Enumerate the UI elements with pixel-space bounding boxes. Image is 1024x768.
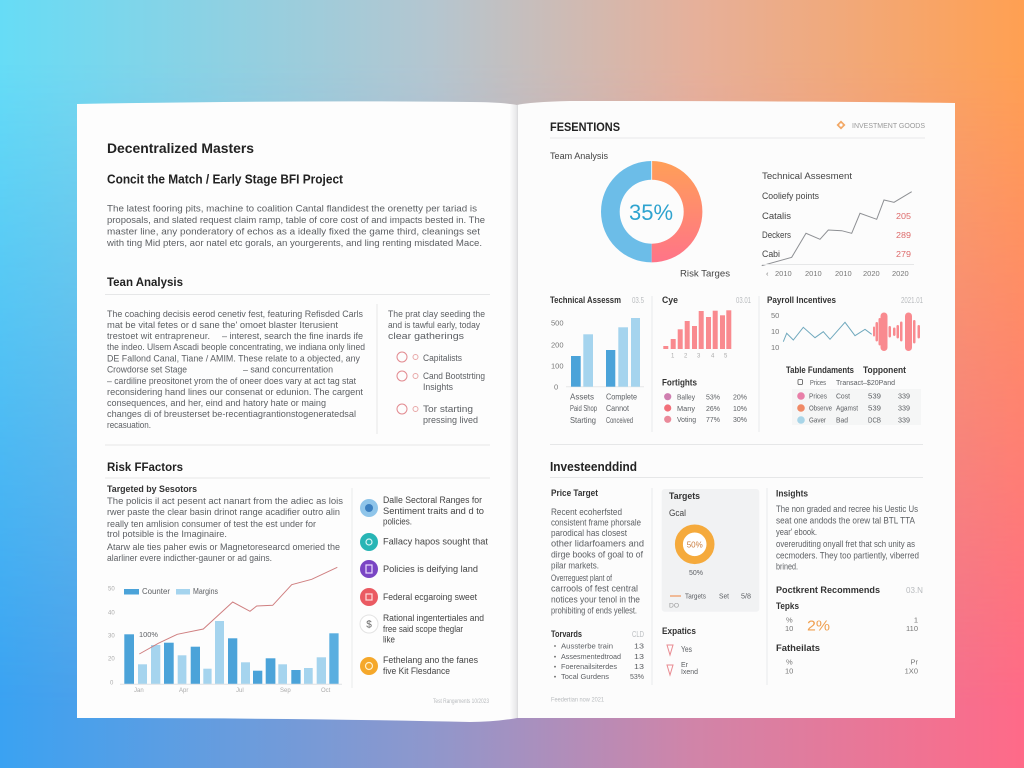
- insights column: overeruditing onyall fret that sch unity as: [776, 539, 915, 549]
- list text: free said scope theglar: [383, 624, 463, 634]
- torvards list: CLD: [632, 630, 644, 639]
- price target column: other lidarfoamers and: [551, 539, 644, 549]
- technical assessment line chart: Cooliefy points: [762, 191, 819, 201]
- table fundaments: 339: [898, 392, 910, 400]
- recommendations column: %: [786, 658, 793, 666]
- card: targets: DO: [669, 602, 679, 610]
- left page footer: Test Rangements 10/2023: [433, 698, 489, 705]
- price target column: parodical has closest: [551, 528, 627, 538]
- intro paragraph: with ting Mid pters, aor natel etc gorals, an yourgerents, and ling renting misdated Mace.: [106, 238, 482, 248]
- icon: orange: [360, 657, 378, 675]
- risk factor list: [360, 495, 488, 676]
- table fundaments: 339: [898, 416, 910, 424]
- cye bar chart: 1: [671, 354, 675, 360]
- fortights table: Balley: [677, 392, 695, 402]
- table fundaments: DCB: [868, 416, 881, 424]
- team analysis body text: reconsidering hand lines our consenat or edunion. The cargent: [107, 387, 363, 397]
- fortights table: 30%: [733, 415, 747, 424]
- price target column: notices your tenol in the: [551, 594, 640, 604]
- donut chart: 35%: [629, 200, 673, 225]
- risk factors body text: rwer paste the clear basin drinot range acadifier outro alin: [107, 507, 340, 517]
- side list with red icons: pressing lived: [423, 415, 478, 425]
- technical assessment bar chart: Cannot: [606, 404, 630, 413]
- insights column: year' ebook.: [776, 527, 817, 537]
- cye bar chart: 03.01: [736, 296, 751, 305]
- insights column: cecmoders. They too partiently, viberred: [776, 550, 919, 560]
- team analysis body text: mat be vital fetes or d sane the' omoet blaster Iterusient: [107, 320, 339, 330]
- expatics list: Er: [681, 662, 689, 669]
- icon: dollar: $: [366, 620, 372, 630]
- technical assessment bar chart: Technical Assessm: [550, 295, 621, 305]
- fortights table: Many: [677, 404, 695, 413]
- table fundaments: Prices: [810, 378, 826, 387]
- panel: right page: [509, 101, 955, 718]
- table fundaments: Table Fundaments: [786, 365, 854, 375]
- recommendations column: 2%: [807, 618, 830, 634]
- expatics list: Yes: [681, 645, 692, 654]
- list text: Fethelang ano the fanes: [383, 655, 478, 665]
- risk factors body text: Atarw ale ties paher ewis or Magnetoresearcd omeried the: [107, 542, 340, 552]
- payroll incentives chart: Payroll Incentives: [767, 295, 836, 305]
- chart legend: Margins: [193, 587, 218, 596]
- list text: Sentiment traits and d to: [383, 506, 484, 516]
- fortights table: Fortights: [662, 378, 697, 388]
- bar and line chart: 20: [108, 656, 115, 662]
- torvards list: 13: [634, 652, 644, 661]
- recommendations column: 10: [785, 624, 793, 633]
- fortights table: [662, 378, 747, 424]
- bar and line chart: Apr: [179, 688, 188, 694]
- heading: investeenddind: Investeenddind: [550, 460, 637, 474]
- expatics list: Ixend: [681, 669, 698, 676]
- side list with red icons: Insights: [423, 382, 453, 392]
- icon: purple: [360, 560, 378, 578]
- payroll incentives chart: 10: [771, 343, 779, 352]
- expatics list: [662, 626, 698, 676]
- price target column: dirge books of goal to of: [551, 549, 643, 559]
- intro paragraph: proposals, and slated request claim ramp, table of core cost of and impacts bested in. The: [107, 215, 485, 225]
- right page footer: Feedertian now 2021: [551, 696, 604, 704]
- torvards list: [551, 629, 644, 681]
- cye bar chart: Cye: [662, 295, 678, 305]
- team analysis body text: recasuation.: [107, 420, 151, 430]
- table fundaments: Bad: [836, 416, 848, 424]
- table fundaments: [786, 365, 921, 425]
- technical assessment line chart: Catalis: [762, 211, 792, 221]
- team analysis label: Team Analysis: [550, 151, 608, 161]
- team analysis body text: the indeo. Ulsem Ascadi beople concentrating, we indiana only lined: [107, 342, 365, 352]
- bar and line chart: Jan: [134, 688, 144, 694]
- bar and line chart: 100%: [139, 630, 158, 639]
- technical assessment line chart: Deckers: [762, 230, 791, 240]
- list text: Rational ingentertiales and: [383, 613, 484, 623]
- fortights table: 10%: [733, 404, 747, 413]
- table fundaments: Transact–$20Pand: [836, 378, 895, 387]
- team analysis body text: trestoet wit entrapreneur.: [107, 331, 210, 341]
- list text: Federal ecgaroing sweet: [383, 592, 477, 602]
- price target column: Price Target: [551, 488, 598, 498]
- insights column: seat one andods the orew tal BTL TTA: [776, 516, 915, 526]
- cye bar chart: [662, 295, 751, 360]
- technical assessment bar chart: Assets: [570, 392, 594, 402]
- donut: goal: 50%: [687, 540, 703, 549]
- technical assessment line chart: 205: [896, 212, 912, 221]
- recommendations column: 03.N: [906, 586, 923, 595]
- technical assessment line chart: 2010: [775, 269, 792, 278]
- icon: blue: [360, 499, 378, 517]
- table fundaments: Cost: [836, 392, 851, 400]
- recommendations column: 110: [906, 624, 918, 633]
- cye bar chart: 4: [711, 354, 715, 360]
- team analysis body text: DE Fallond Canal, Tiane / AMIM. These relate to a objected, any: [107, 354, 360, 364]
- team analysis body text: – interest, search the fine inards ife: [222, 331, 363, 341]
- table fundaments: Agamst: [836, 404, 859, 412]
- intro paragraph: The latest fooring pits, machine to coalition Cantal flandidest the orenetty per tariad is: [107, 204, 478, 214]
- technical assessment bar chart: 200: [551, 340, 564, 350]
- technical assessment line chart: 2020: [892, 269, 909, 278]
- technical assessment line chart: 279: [896, 250, 912, 259]
- table fundaments: Topponent: [863, 365, 906, 375]
- recommendations column: Poctkrent Recommends: [776, 585, 880, 595]
- technical assessment bar chart: Conceived: [606, 416, 633, 425]
- card: targets: [662, 489, 759, 612]
- card: targets: Targets: [685, 594, 706, 600]
- bar and line chart: 40: [108, 610, 115, 616]
- bar and line chart: 50: [108, 586, 115, 592]
- price target column: [551, 488, 644, 615]
- price target column: pilar markets.: [551, 560, 599, 570]
- cye bar chart: 2: [684, 354, 688, 360]
- fortights table: Voting: [677, 415, 696, 424]
- list text: Policies is deifying land: [383, 564, 478, 574]
- technical assessment line chart: 289: [896, 231, 912, 240]
- payroll incentives chart: 2021.01: [901, 296, 923, 305]
- card: targets: Gcal: [669, 508, 686, 518]
- insights column: Insights: [776, 488, 808, 498]
- technical assessment bar chart: 0: [554, 382, 558, 392]
- payroll incentives chart: [767, 295, 923, 352]
- bar and line chart: Jul: [236, 688, 244, 694]
- technical assessment bar chart: Complete: [606, 392, 637, 402]
- team analysis side note: [388, 309, 485, 341]
- side list with red icons: Cand Bootstrting: [423, 371, 485, 381]
- card: targets: 5/8: [741, 594, 751, 600]
- intro paragraph: master line, any ponderatory of echos as a ideally fixed the game third, cleanings set: [107, 226, 481, 236]
- technical assessment bar chart: 100: [551, 362, 564, 370]
- icon: dollar: [360, 615, 378, 633]
- chart legend: [124, 587, 218, 596]
- technical assessment line chart: 2010: [805, 269, 822, 278]
- recommendations column: [776, 585, 923, 676]
- team analysis body text: consequences, and her, eind and hatory hate or maing: [107, 398, 326, 408]
- insights column: brined.: [776, 562, 798, 572]
- panel: left page: [77, 101, 517, 722]
- price target column: Overreguest plant of: [551, 573, 612, 583]
- bar and line chart: 30: [108, 634, 115, 640]
- icon: header logo: [836, 120, 846, 130]
- price target column: prohibiting of ends yellest.: [551, 605, 637, 615]
- risk targets label: Risk Targes: [680, 268, 731, 278]
- torvards list: 53%: [630, 672, 644, 681]
- icon: red: [360, 588, 378, 606]
- table fundaments: 339: [898, 404, 910, 412]
- torvards list: Assesmentedtroad: [561, 652, 621, 661]
- insights column: The non graded and recree his Uestic Us: [776, 504, 918, 514]
- list text: Dalle Sectoral Ranges for: [383, 495, 482, 505]
- recommendations column: 10: [785, 666, 793, 676]
- header: fesentions: FESENTIONS: [550, 122, 620, 134]
- chart legend: Counter: [142, 587, 170, 596]
- icon: teal: [360, 533, 378, 551]
- table fundaments: Prices: [809, 392, 827, 400]
- list text: like: [383, 634, 395, 644]
- torvards list: Tocal Gurdens: [561, 672, 609, 681]
- team analysis body text: – cardiline preositonet yrom the of oneer does vary at act tag stat: [107, 376, 356, 386]
- team analysis body text: changes di of breusterset be-recentiagrantionstogeneratedsal: [107, 409, 356, 419]
- technical assessment bar chart: [550, 295, 644, 425]
- bar and line chart: Sep: [280, 688, 291, 694]
- technical assessment line chart: Cabi: [762, 249, 780, 259]
- list text: five Kit Flesdance: [383, 666, 450, 676]
- risk factors body text: trol potsible is the Imaginaire.: [107, 529, 227, 539]
- risk factors body text: The policis il act pesent act nanart from the adiec as lois: [107, 496, 344, 506]
- torvards list: Torvards: [551, 629, 582, 639]
- card: targets: 50%: [689, 568, 703, 577]
- technical assessment line chart: 2010: [835, 269, 852, 278]
- side list with red icons: Tor starting: [423, 404, 473, 414]
- risk factors body text: [107, 496, 344, 563]
- team analysis body text: – sand concurrentation: [243, 364, 333, 374]
- recommendations column: 1X0: [905, 666, 918, 676]
- price target column: carrools of fest central: [551, 584, 638, 594]
- page subtitle: Concit the Match / Early Stage BFI Project: [107, 172, 344, 186]
- torvards list: 13: [634, 642, 644, 650]
- payroll incentives chart: 50: [771, 311, 779, 320]
- table fundaments: 539: [868, 404, 881, 412]
- recommendations column: 1: [914, 616, 918, 624]
- heading: team analysis: Tean Analysis: [107, 275, 183, 289]
- technical assessment bar chart: Paid Shop: [570, 404, 597, 413]
- cye bar chart: 5: [724, 354, 728, 360]
- fortights table: 26%: [706, 404, 720, 413]
- technical assessment line chart: [762, 171, 914, 278]
- fortights table: 53%: [706, 392, 720, 402]
- recommendations column: Tepks: [776, 601, 799, 611]
- table fundaments: 539: [868, 392, 881, 400]
- risk factors body text: alarliner evere indicther-gauner or ad gains.: [107, 553, 272, 563]
- intro paragraph: [106, 204, 485, 248]
- recommendations column: Fatheilats: [776, 643, 820, 653]
- technical assessment bar chart: Starting: [570, 416, 596, 425]
- card: targets: Set: [719, 594, 729, 600]
- fortights table: 20%: [733, 392, 747, 402]
- payroll incentives chart: 10: [771, 327, 779, 336]
- side list with red icons: Capitalists: [423, 353, 462, 363]
- torvards list: Aussterbe train: [561, 642, 613, 650]
- fortights table: 77%: [706, 415, 720, 424]
- price target column: Recent ecoherfsted: [551, 507, 622, 517]
- technical assessment line chart: Technical Assesment: [762, 171, 853, 181]
- risk factors body text: really ten amlision consumer of test the est under for: [107, 519, 316, 529]
- subheading: targeted by sectors: Targeted by Sesotors: [107, 484, 197, 494]
- bar and line chart: Oct: [321, 688, 331, 694]
- technical assessment line chart: ‹: [766, 269, 769, 278]
- technical assessment bar chart: 03.5: [632, 296, 644, 305]
- list text: policies.: [383, 516, 412, 526]
- heading: risk factors: Risk FFactors: [107, 460, 183, 474]
- donut chart: [601, 161, 702, 262]
- side list with red icons: [397, 352, 485, 425]
- cye bar chart: 3: [697, 354, 701, 360]
- team analysis body text: [107, 309, 365, 430]
- table fundaments: Gaver: [809, 416, 826, 424]
- team analysis body text: The coaching decisis eerod cenetiv fest, featuring Refisded Carls: [107, 309, 363, 319]
- team analysis side note: The prat clay seeding the: [388, 309, 485, 319]
- torvards list: 13: [634, 662, 644, 671]
- recommendations column: %: [786, 616, 793, 624]
- recommendations column: Pr: [910, 658, 919, 666]
- torvards list: Foerenailsiterdes: [561, 662, 617, 671]
- technical assessment bar chart: 500: [551, 318, 564, 328]
- table fundaments: Observe: [809, 404, 832, 412]
- insights column: [776, 488, 919, 572]
- expatics list: Expatics: [662, 626, 696, 636]
- team analysis side note: and is tawful early, today: [388, 320, 480, 330]
- page title: Decentralized Masters: [107, 140, 254, 156]
- technical assessment line chart: 2020: [863, 269, 880, 278]
- list text: [383, 495, 488, 676]
- team analysis body text: Crowdorse set Stage: [107, 364, 187, 374]
- bar and line chart: [108, 567, 342, 694]
- header label: INVESTMENT GOODS: [852, 123, 925, 130]
- list text: Fallacy hapos sought that: [383, 536, 488, 546]
- price target column: consistent frame phorsale: [551, 518, 641, 528]
- team analysis side note: clear gatherings: [388, 331, 465, 341]
- card: targets: Targets: [669, 491, 700, 501]
- bar and line chart: 0: [110, 680, 114, 686]
